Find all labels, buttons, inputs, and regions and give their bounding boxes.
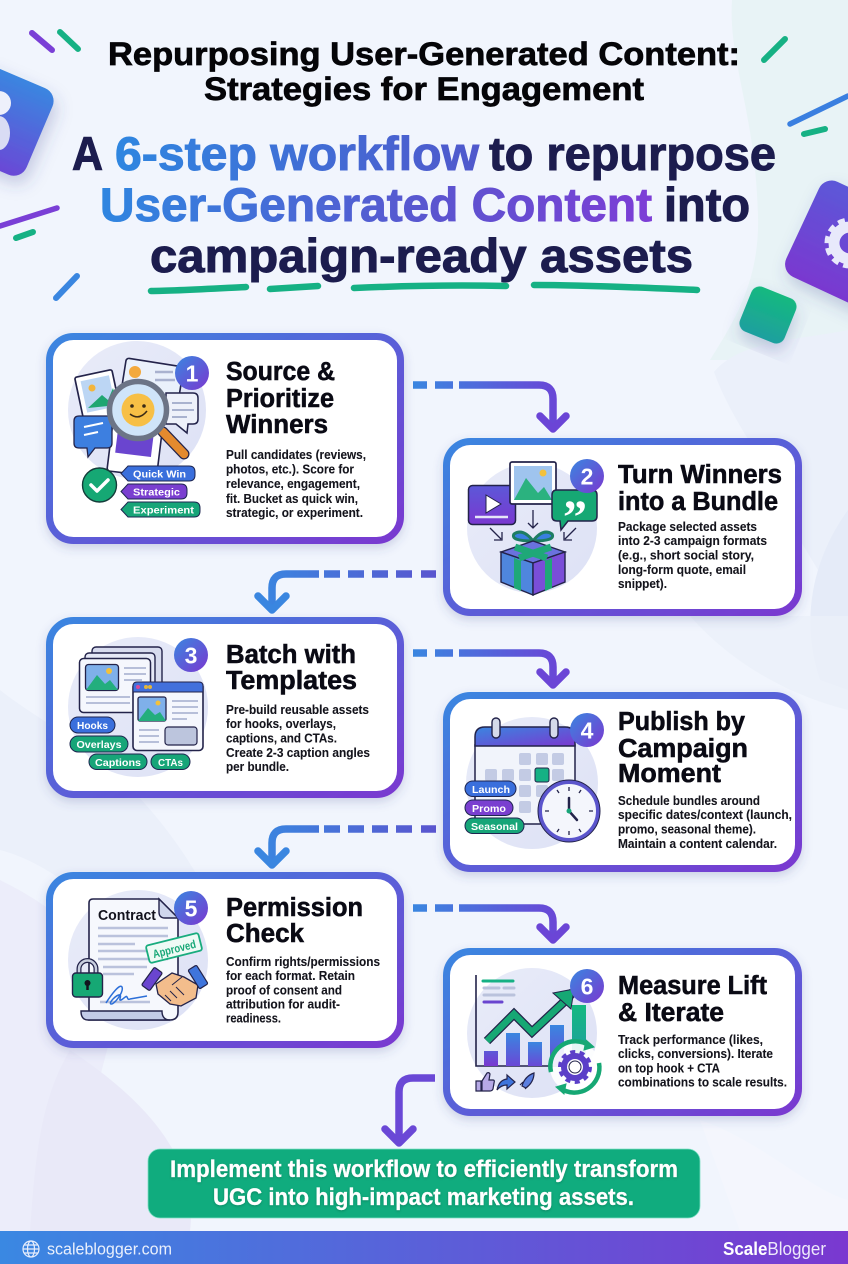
- icon: contract, lock and handshake: Approved: [152, 939, 197, 961]
- step 6 heading: Measure Lift: [618, 972, 767, 1000]
- decoration: green tile: [737, 284, 799, 346]
- tag: strategic: [121, 484, 187, 499]
- title: [108, 36, 740, 107]
- tag: strategic: Strategic: [133, 486, 180, 498]
- step 1 heading: Prioritize: [226, 385, 334, 413]
- callout: call to action: Implement this workflow to efficiently transform: [170, 1156, 678, 1183]
- step 5 description: [226, 954, 380, 1026]
- arrow: step 5 to step 6: [413, 908, 566, 940]
- footer bar: [0, 1231, 848, 1264]
- step 6 description: clicks, conversions). Iterate: [618, 1046, 773, 1061]
- step 5 description: attribution for audit-: [226, 996, 340, 1012]
- step number 5: 5: [185, 896, 198, 922]
- step number 3: [174, 638, 208, 672]
- panel: step 2 turn winners into a bundle: [446, 442, 798, 612]
- step 2 heading: into a Bundle: [618, 488, 778, 516]
- callout: call to action: [148, 1149, 700, 1218]
- headline: 6-step workflow: [115, 127, 479, 180]
- tag: promo: Promo: [472, 803, 506, 815]
- step 4 heading: Campaign: [618, 735, 748, 763]
- icon: globe: [23, 1241, 39, 1257]
- step 5 description: readiness.: [226, 1010, 281, 1026]
- panel: step 5 permission check: [50, 876, 400, 1044]
- step 4 description: [618, 793, 792, 851]
- step 5 heading: Permission: [226, 894, 363, 922]
- step number 4: 4: [581, 718, 594, 744]
- headline: User-Generated Content: [100, 178, 652, 231]
- step 6 description: [618, 1032, 787, 1090]
- tag: experiment: Experiment: [133, 504, 195, 516]
- tag: launch: Launch: [472, 784, 510, 796]
- step 4 description: promo, seasonal theme).: [618, 822, 756, 836]
- step 2 heading: [618, 461, 782, 516]
- tag: overlays: [70, 736, 128, 752]
- step 4 heading: Moment: [618, 760, 722, 788]
- tag: seasonal: Seasonal: [471, 821, 518, 833]
- tag: launch: [465, 781, 516, 796]
- panel: step 3 batch with templates: [50, 620, 400, 794]
- title: Repurposing User-Generated Content:: [108, 36, 740, 72]
- step 4 heading: Publish by: [618, 708, 746, 736]
- arrow: step 1 to step 2: [413, 385, 566, 429]
- step 4 description: Maintain a content calendar.: [618, 836, 777, 851]
- step 6 description: combinations to scale results.: [618, 1074, 787, 1090]
- headline: to repurpose: [489, 127, 776, 180]
- tag: quick win: [121, 466, 195, 481]
- step 1 description: fit. Bucket as quick win,: [226, 491, 358, 506]
- icon: contract, lock and handshake: [68, 890, 208, 1030]
- step 1 description: strategic, or experiment.: [226, 505, 363, 520]
- step 1 description: photos, etc.). Score for: [226, 462, 354, 476]
- tag: experiment: [121, 502, 200, 517]
- step number 2: [570, 459, 604, 493]
- headline: into: [664, 178, 750, 231]
- step 1 heading: Source &: [226, 358, 335, 386]
- headline underline: [151, 285, 697, 291]
- headline: A: [72, 127, 103, 180]
- arrow: step 6 to call to action: [385, 1078, 435, 1143]
- step 1 heading: [226, 358, 335, 439]
- icon: assets into gift box: ”: [563, 491, 587, 544]
- step 6 description: on top hook + CTA: [618, 1060, 721, 1076]
- step 2 description: (e.g., short social story,: [618, 548, 754, 562]
- step 3 heading: Batch with: [226, 641, 356, 669]
- step 3 description: Create 2-3 caption angles: [226, 745, 370, 760]
- step 2 heading: Turn Winners: [618, 461, 782, 489]
- headline: [72, 127, 776, 282]
- arrow: step 3 to step 4: [413, 653, 566, 685]
- icon: contract, lock and handshake: Contract: [98, 908, 156, 924]
- step 2 description: snippet).: [618, 576, 667, 591]
- step 2 description: into 2-3 campaign formats: [618, 533, 767, 548]
- step 1 description: Pull candidates (reviews,: [226, 447, 366, 462]
- icon: growth chart and iteration gear: [467, 968, 600, 1098]
- step 3 heading: [226, 641, 357, 695]
- step 6 heading: & Iterate: [618, 999, 724, 1027]
- step 4 description: specific dates/context (launch,: [618, 807, 792, 822]
- step 2 description: [618, 519, 767, 591]
- tag: overlays: Overlays: [76, 739, 122, 751]
- step 1 heading: Winners: [226, 411, 328, 439]
- decoration: purple gear tile: [780, 176, 848, 315]
- panel: step 4 publish by campaign moment: [446, 696, 798, 868]
- step 1 description: relevance, engagement,: [226, 476, 360, 491]
- website address: scaleblogger.com: [47, 1240, 172, 1258]
- tag: promo: [465, 800, 513, 816]
- icon: assets into gift box: [467, 462, 597, 595]
- decoration: confetti strokes: [0, 32, 848, 298]
- step 5 heading: Check: [226, 920, 305, 948]
- step number 4: [570, 713, 604, 747]
- step 6 heading: [618, 972, 767, 1027]
- step 3 description: Pre-build reusable assets: [226, 702, 369, 717]
- step number 1: 1: [186, 360, 199, 386]
- tag: seasonal: [465, 818, 524, 834]
- title: Strategies for Engagement: [204, 71, 644, 107]
- step 6 description: Track performance (likes,: [618, 1032, 763, 1047]
- step number 3: 3: [185, 642, 197, 668]
- panel: step 1 source and prioritize: [50, 336, 400, 540]
- arrow: step 4 to step 5: [258, 829, 436, 865]
- icon: calendar and clock: [466, 717, 600, 849]
- tag: hooks: [70, 717, 115, 733]
- step 5 heading: [226, 894, 363, 948]
- tag: quick win: Quick Win: [133, 468, 186, 480]
- step 3 description: [226, 702, 370, 774]
- panel: step 6 measure lift and iterate: [446, 952, 798, 1112]
- step number 5: [174, 891, 208, 925]
- step 3 description: for hooks, overlays,: [226, 716, 336, 731]
- tag: CTAs: CTAs: [158, 757, 183, 769]
- tag: captions: Captions: [95, 757, 141, 769]
- step 4 description: Schedule bundles around: [618, 793, 760, 808]
- step 2 description: long-form quote, email: [618, 562, 746, 577]
- tag: captions: [89, 754, 147, 770]
- step number 1: [175, 356, 209, 390]
- icon: template windows: [68, 637, 208, 777]
- step 1 description: [226, 447, 366, 520]
- step 5 description: for each format. Retain: [226, 968, 355, 983]
- brand name: ScaleBlogger: [723, 1239, 826, 1259]
- decoration: blue profile tile: [0, 59, 58, 180]
- icon: like, share and rocket: [476, 1073, 534, 1091]
- step 4 heading: [618, 708, 748, 788]
- callout: call to action: UGC into high-impact marketing assets.: [213, 1184, 634, 1211]
- step 2 description: Package selected assets: [618, 519, 757, 534]
- step number 6: [570, 969, 604, 1003]
- step number 6: 6: [581, 974, 593, 1000]
- step 3 description: per bundle.: [226, 759, 289, 774]
- step 3 heading: Templates: [226, 667, 357, 695]
- arrow: step 2 to step 3: [258, 574, 436, 610]
- step number 2: 2: [581, 464, 593, 490]
- tag: hooks: Hooks: [77, 720, 108, 732]
- step 5 description: Confirm rights/permissions: [226, 954, 380, 969]
- step 5 description: proof of consent and: [226, 982, 342, 998]
- step 3 description: captions, and CTAs.: [226, 730, 337, 746]
- icon: magnifier over user content: [68, 341, 206, 502]
- tag: CTAs: [151, 754, 190, 770]
- headline: campaign-ready assets: [150, 229, 693, 282]
